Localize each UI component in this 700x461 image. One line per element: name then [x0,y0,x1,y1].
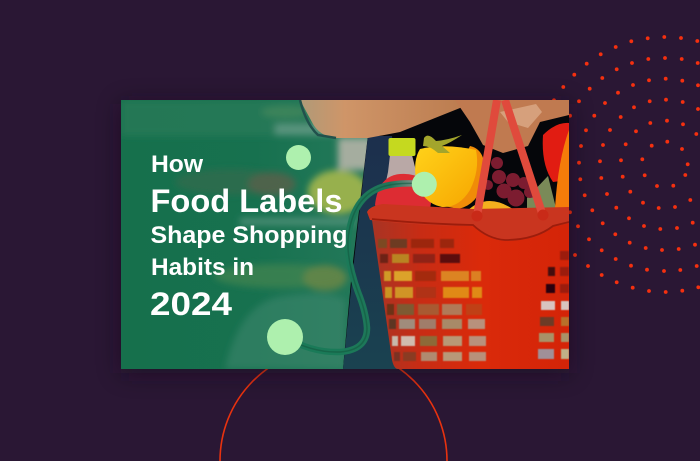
basket body [372,220,569,369]
title: Habits in [151,254,254,281]
apple [375,174,432,210]
card shadow [121,104,569,373]
title: Shape Shopping [150,222,348,249]
leaf [527,176,556,208]
basket handles [477,100,543,216]
infographic canvas [121,35,700,461]
title: How [151,151,203,178]
mint circle middle [412,172,437,197]
basket holes right [538,251,569,359]
orange circle outline [220,347,447,461]
basket rim [367,204,569,241]
mint circle bottom [267,319,303,355]
hand [455,100,569,153]
yellow pepper [415,146,477,207]
pepper stem [423,135,462,153]
bottle [386,138,416,179]
red pepper [543,123,569,182]
basket holes left [378,239,486,361]
green shelf backdrop [121,100,368,369]
green connector line [285,183,424,352]
orange pepper [555,130,569,208]
title: Food Labels [150,183,342,219]
arm [301,100,460,138]
title: 2024 [150,286,232,322]
grapes [486,157,533,206]
blurred produce shelves [121,100,375,369]
mint circle top [286,145,311,170]
orange fruit [470,201,512,209]
photo panel [121,100,569,369]
orange pepper behind [447,146,483,208]
title [150,151,348,322]
dot pattern [552,35,700,294]
body and shirt [343,100,569,369]
